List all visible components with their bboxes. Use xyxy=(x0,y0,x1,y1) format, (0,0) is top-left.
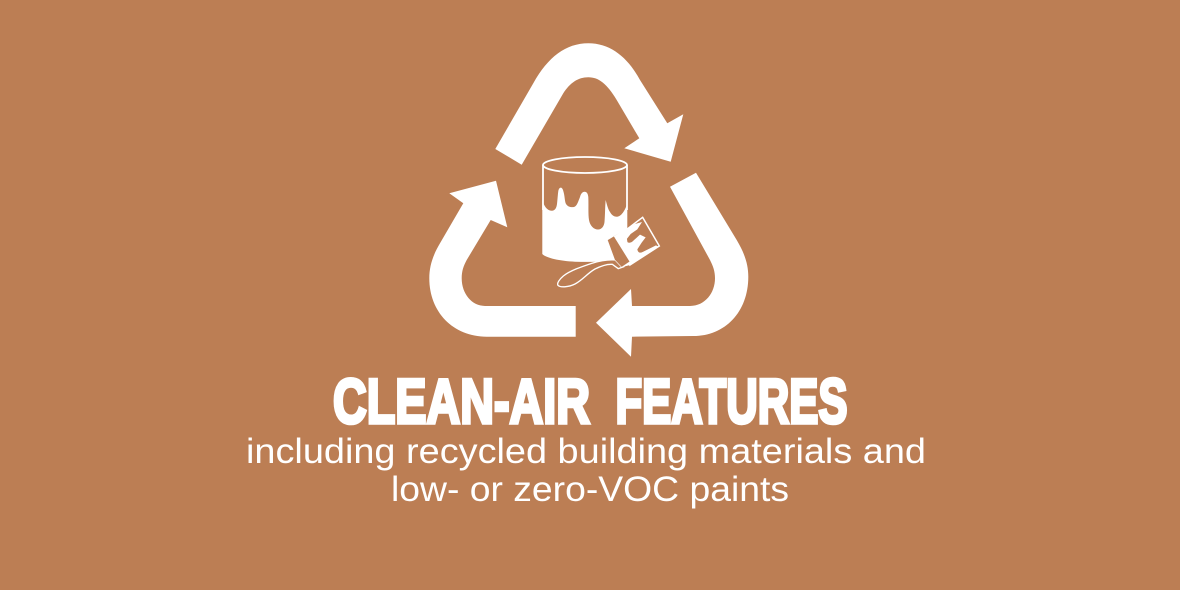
can paint fill with drips xyxy=(542,188,627,262)
arrow: top xyxy=(495,43,683,165)
heading xyxy=(333,367,848,437)
brush ferrule xyxy=(607,236,630,267)
text block: description: low- or zero-VOC paints xyxy=(391,470,789,509)
brush head xyxy=(625,217,659,265)
heading: FEATURES xyxy=(616,367,848,437)
icon: recycling arrows with paint can xyxy=(429,43,748,357)
can outline xyxy=(543,165,627,210)
arrow: left xyxy=(429,181,576,337)
heading: CLEAN-AIR xyxy=(333,367,590,437)
icon: paint can xyxy=(542,157,627,262)
brush handle xyxy=(558,260,624,287)
text block: description xyxy=(246,432,926,509)
icon: paint brush xyxy=(558,217,659,287)
text block: description: including recycled building materials and xyxy=(246,432,926,471)
brush bristles xyxy=(614,222,658,267)
arrow: right xyxy=(596,173,748,357)
